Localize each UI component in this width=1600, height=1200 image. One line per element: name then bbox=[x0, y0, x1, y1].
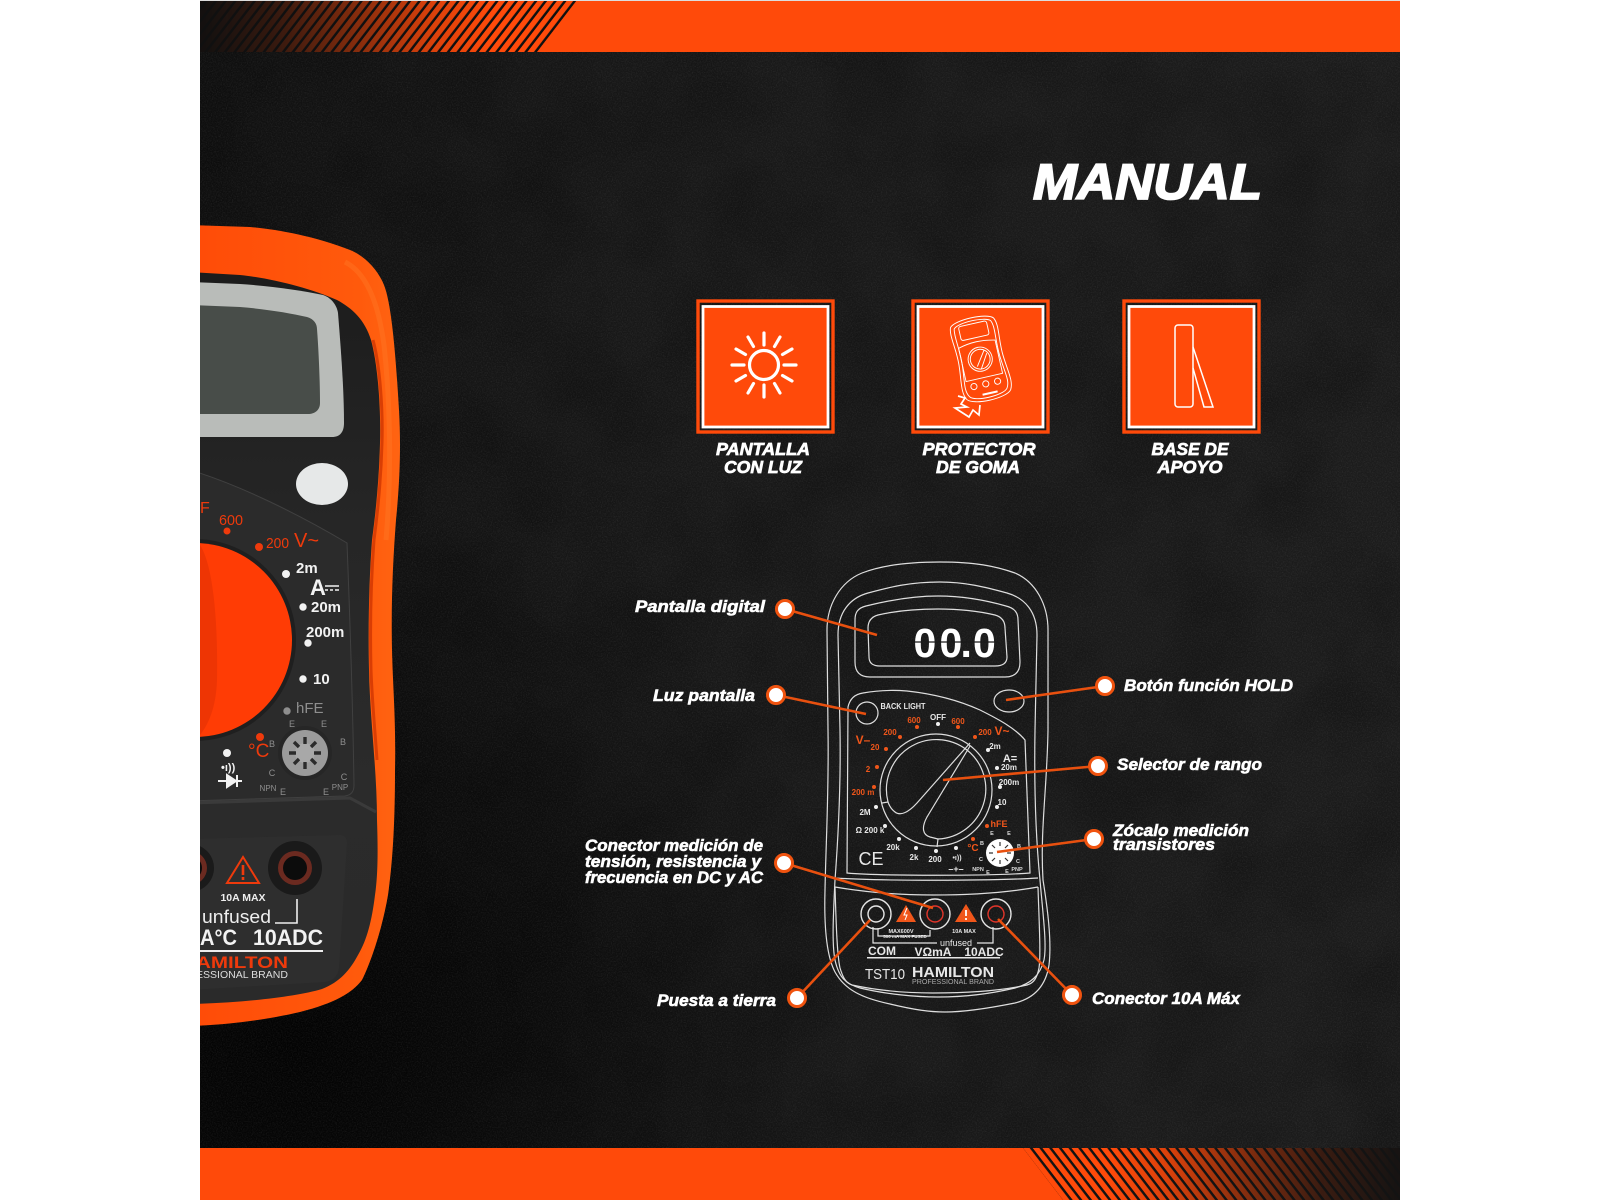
jacks on photo bbox=[166, 841, 322, 895]
range labels on photo: 600 bbox=[219, 512, 243, 529]
feature: base de apoyo bbox=[1124, 301, 1259, 477]
ridge between panels bbox=[190, 798, 376, 812]
caption: protector de goma: DE GOMA bbox=[936, 457, 1020, 477]
caption: base de apoyo bbox=[1152, 439, 1230, 477]
photo: multimeter cropped at left edge bbox=[200, 225, 400, 1026]
dial scale labels: V~ bbox=[994, 724, 1010, 738]
range labels on photo: 200 bbox=[266, 535, 289, 552]
dial scale labels bbox=[852, 702, 1019, 874]
dial scale labels: •ı)) bbox=[952, 855, 962, 862]
jack labels: 500 mA MAX FUSED bbox=[883, 934, 928, 939]
display bezel outline bbox=[855, 596, 1020, 677]
callout: boton funcion hold: Botón función HOLD bbox=[1124, 677, 1293, 695]
caption: protector de goma bbox=[922, 439, 1036, 477]
socket drawing: E bbox=[1007, 831, 1011, 837]
background panel bbox=[200, 0, 1400, 1200]
dial scale dots bbox=[872, 722, 1002, 853]
icon: tilted meter bbox=[947, 312, 1014, 406]
line drawing of multimeter bbox=[825, 562, 1050, 1012]
callout: conector medicion: frecuencia en DC y AC bbox=[585, 869, 764, 887]
LCD screen bbox=[190, 305, 320, 414]
range labels on photo bbox=[200, 500, 348, 797]
caption: pantalla con luz bbox=[716, 439, 810, 477]
hold button bbox=[296, 463, 348, 505]
dial scale labels: 600 bbox=[907, 716, 921, 725]
range labels on photo: E bbox=[289, 719, 295, 729]
warning triangles bbox=[896, 904, 977, 922]
dial scale labels: 200 m bbox=[852, 788, 874, 797]
dial scale labels: 2m bbox=[989, 742, 1001, 751]
dial scale labels: 600 bbox=[951, 717, 965, 726]
dial knob bbox=[94, 539, 296, 741]
icon frame 3 bbox=[1124, 301, 1259, 432]
dial scale labels: hFE bbox=[990, 819, 1008, 829]
range labels on photo: C bbox=[341, 772, 348, 782]
LCD digits: 00.0 bbox=[914, 620, 996, 666]
transistor socket on photo bbox=[278, 726, 332, 780]
range labels on photo: E bbox=[280, 787, 286, 797]
dial scale labels: V– bbox=[856, 733, 871, 747]
jack labels bbox=[865, 929, 1004, 986]
callout: conector medicion: Conector medición de bbox=[585, 837, 763, 855]
dial scale labels: CE bbox=[858, 849, 884, 869]
jack brackets bbox=[873, 927, 993, 943]
caption: pantalla con luz: PANTALLA bbox=[716, 439, 810, 459]
jack labels: 10ADC bbox=[964, 945, 1004, 959]
range labels on photo: hFE bbox=[296, 700, 324, 717]
dial scale labels: –+– bbox=[948, 864, 964, 874]
callout: zocalo medicion transistores: transistores bbox=[1113, 836, 1215, 854]
dial scale labels: 200 bbox=[978, 728, 992, 737]
bottom orange band bbox=[200, 1148, 1400, 1200]
caption: protector de goma: PROTECTOR bbox=[922, 439, 1036, 459]
callout: pantalla digital bbox=[635, 598, 877, 635]
icon: impact burst bbox=[955, 396, 980, 417]
callout: conector medicion: tensión, resistencia y bbox=[585, 853, 762, 871]
panel divider lines bbox=[835, 878, 1038, 895]
callout: luz pantalla bbox=[653, 686, 866, 714]
jack labels on photo: unfused bbox=[202, 907, 271, 927]
jack panel bbox=[190, 835, 347, 990]
jack labels: unfused bbox=[940, 938, 972, 948]
range labels on photo: E bbox=[321, 719, 327, 729]
rotary dial bbox=[880, 734, 992, 847]
icon frame 1 bbox=[698, 301, 833, 432]
range labels on photo: F bbox=[200, 500, 210, 517]
range labels on photo: °C bbox=[248, 741, 269, 762]
callout: conector 10a max: Conector 10A Máx bbox=[1092, 990, 1241, 1008]
callout: conector 10a max bbox=[998, 919, 1241, 1008]
callout: zocalo medicion transistores: Zócalo medición bbox=[1112, 822, 1249, 840]
display bezel bbox=[190, 282, 344, 437]
socket drawing bbox=[972, 831, 1023, 876]
callout: pantalla digital: Pantalla digital bbox=[635, 598, 765, 616]
caption: base de apoyo: APOYO bbox=[1156, 457, 1223, 477]
dial panel bbox=[190, 470, 354, 801]
caption: base de apoyo: BASE DE bbox=[1152, 439, 1230, 459]
range labels on photo: V~ bbox=[294, 530, 319, 552]
jack labels: 10A MAX bbox=[952, 929, 976, 935]
jack labels on photo: ESSIONAL BRAND bbox=[196, 970, 288, 981]
jack labels on photo: A°C bbox=[200, 925, 237, 950]
dial scale labels: 10 bbox=[998, 798, 1007, 807]
callout: puesta a tierra: Puesta a tierra bbox=[657, 992, 776, 1010]
callout: puesta a tierra bbox=[657, 920, 870, 1010]
warning triangle on photo bbox=[227, 857, 259, 883]
jack labels: MAX600V bbox=[888, 929, 914, 935]
dial scale labels: 20m bbox=[1001, 763, 1017, 772]
jack labels: TST10 bbox=[865, 966, 905, 983]
socket drawing: B bbox=[1017, 844, 1021, 850]
socket drawing: PNP bbox=[1011, 867, 1023, 873]
outer shell outline bbox=[825, 562, 1050, 1012]
jack labels: PROFESSIONAL BRAND bbox=[912, 977, 995, 986]
dial scale labels: 200 bbox=[883, 728, 897, 737]
input jacks bbox=[861, 899, 1011, 929]
dial scale labels: A= bbox=[1003, 753, 1017, 765]
jack labels on photo: 10ADC bbox=[253, 925, 323, 950]
dial scale labels: 200 bbox=[928, 855, 942, 864]
range labels on photo: B bbox=[269, 739, 275, 749]
icon: sun bbox=[732, 333, 796, 397]
jack labels on photo: AMILTON bbox=[196, 953, 288, 972]
jack labels on photo bbox=[196, 892, 323, 981]
dial scale labels: BACK LIGHT bbox=[880, 702, 926, 711]
range labels on photo: NPN bbox=[260, 784, 277, 793]
caption: pantalla con luz: CON LUZ bbox=[724, 457, 803, 477]
range labels on photo: E bbox=[323, 787, 329, 797]
jack labels: VΩmA bbox=[915, 945, 952, 959]
dial scale labels: 2 bbox=[866, 765, 871, 774]
socket drawing: NPN bbox=[972, 867, 984, 873]
socket drawing: C bbox=[979, 857, 983, 863]
callout: zocalo medicion transistores bbox=[997, 822, 1249, 854]
range labels on photo: 2m bbox=[296, 560, 318, 577]
inner rubber outline bbox=[833, 582, 1045, 997]
range labels on photo: PNP bbox=[332, 783, 348, 792]
dial scale labels: 2k bbox=[910, 853, 919, 862]
callout: selector de rango bbox=[943, 756, 1262, 780]
range labels on photo: A bbox=[310, 575, 326, 600]
range labels on photo: C bbox=[269, 768, 276, 778]
dial panel outline bbox=[847, 690, 1030, 875]
callout: boton funcion hold bbox=[1006, 677, 1293, 700]
jack labels: COM bbox=[868, 944, 896, 958]
dial scale labels: 20 bbox=[871, 743, 880, 752]
dial scale labels: OFF bbox=[930, 713, 946, 722]
callout: selector de rango: Selector de rango bbox=[1117, 756, 1262, 774]
socket drawing: E bbox=[990, 831, 994, 837]
callout: luz pantalla: Luz pantalla bbox=[653, 687, 755, 705]
socket drawing: C bbox=[1016, 859, 1020, 865]
rubber protector bbox=[190, 225, 400, 1026]
lower panel outline bbox=[835, 887, 1040, 993]
range labels on photo: 200m bbox=[306, 624, 344, 641]
socket drawing: E bbox=[1005, 869, 1009, 875]
icon: stand bbox=[1175, 325, 1213, 407]
dial scale labels: 200m bbox=[999, 778, 1019, 787]
title: MANUAL bbox=[1033, 154, 1262, 210]
rubber inner shadow seam bbox=[371, 340, 382, 760]
LCD outline bbox=[868, 609, 1007, 666]
hold button bbox=[994, 690, 1024, 712]
jack labels: HAMILTON bbox=[912, 964, 994, 981]
top orange band bbox=[200, 0, 1400, 52]
feature: protector de goma bbox=[913, 301, 1048, 477]
jack labels on photo: 10A MAX bbox=[220, 892, 266, 904]
dial scale labels: Ω 200 k bbox=[856, 826, 885, 835]
icon frame 2 bbox=[913, 301, 1048, 432]
callout: conector medicion bbox=[585, 837, 933, 908]
range labels on photo: 20m bbox=[311, 599, 341, 616]
rubber highlight edge bbox=[345, 262, 390, 540]
range labels on photo: B bbox=[340, 737, 346, 747]
dial scale labels: °C bbox=[967, 843, 979, 854]
back light button bbox=[856, 702, 878, 724]
range labels on photo: •ı)) bbox=[221, 762, 236, 774]
range labels on photo: 10 bbox=[313, 671, 330, 688]
socket drawing: E bbox=[986, 870, 990, 876]
dial scale labels: 20k bbox=[886, 843, 900, 852]
dial scale labels: 2M bbox=[859, 808, 871, 817]
feature: pantalla con luz bbox=[698, 301, 833, 477]
socket drawing: B bbox=[980, 841, 984, 847]
meter body bbox=[190, 272, 380, 1004]
